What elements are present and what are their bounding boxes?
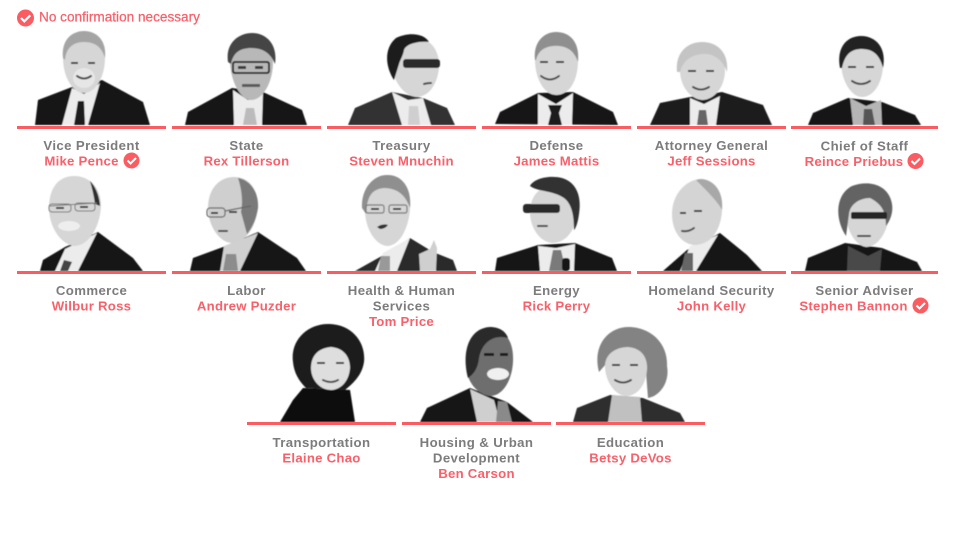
label: Homeland Security, John Kelly: Homeland Security: [648, 283, 775, 298]
label: Chief of Staff, Reince Priebus: [805, 138, 924, 169]
label: Housing & Urban Development, Ben Carson: Housing & Urban: [420, 435, 533, 450]
label: Education, Betsy DeVos: Education: [597, 435, 664, 450]
rule: Jeff Sessions: [637, 126, 786, 129]
label: Education, Betsy DeVos: [589, 435, 672, 466]
label: Labor, Andrew Puzder: Andrew Puzder: [197, 298, 296, 314]
label: Senior Adviser, Stephen Bannon: [799, 283, 928, 314]
label: Vice President, Mike Pence: Vice President: [43, 138, 140, 153]
label: Senior Adviser, Stephen Bannon: Stephen Bannon: [799, 298, 908, 314]
rule: Elaine Chao: [247, 422, 396, 425]
rule: Stephen Bannon: [791, 271, 938, 274]
rule: Andrew Puzder: [172, 271, 321, 274]
portrait: Rex Tillerson: [185, 33, 307, 125]
label: Attorney General, Jeff Sessions: [655, 138, 768, 168]
label: Senior Adviser, Stephen Bannon: Senior Adviser: [815, 283, 914, 298]
label: Health & Human Services, Tom Price: Tom Price: [369, 314, 434, 329]
label: Defense, James Mattis: James Mattis: [514, 154, 599, 168]
rule: John Kelly: [637, 271, 786, 274]
rule: Ben Carson: [402, 422, 551, 425]
rule: Betsy DeVos: [556, 422, 705, 425]
label: Energy, Rick Perry: Rick Perry: [523, 298, 591, 314]
label: Vice President, Mike Pence: Mike Pence: [44, 154, 119, 168]
label: State, Rex Tillerson: Rex Tillerson: [204, 154, 289, 168]
label: Transportation, Elaine Chao: [273, 435, 370, 466]
rule: James Mattis: [482, 126, 631, 129]
label: Vice President, Mike Pence: [43, 138, 140, 168]
portrait: John Kelly: [663, 179, 762, 271]
portrait: Jeff Sessions: [650, 42, 772, 125]
label: Attorney General, Jeff Sessions: Attorney General: [655, 138, 768, 153]
portrait: Tom Price: [355, 175, 457, 271]
label: Transportation, Elaine Chao: Elaine Chao: [282, 450, 361, 466]
portrait: Wilbur Ross: [40, 176, 143, 271]
label: Defense, James Mattis: Defense: [529, 138, 584, 153]
rule: Mike Pence: [17, 126, 166, 129]
rule: Steven Mnuchin: [327, 126, 476, 129]
label: Chief of Staff, Reince Priebus: Chief of Staff: [821, 138, 909, 154]
label: State, Rex Tillerson: [204, 138, 289, 168]
label: Labor, Andrew Puzder: [197, 283, 296, 314]
label: Energy, Rick Perry: Energy: [533, 283, 580, 298]
rule: Tom Price: [327, 271, 476, 274]
label: Treasury, Steven Mnuchin: [349, 138, 454, 168]
label: Housing & Urban Development, Ben Carson: Development: [433, 450, 520, 466]
rule: Rex Tillerson: [172, 126, 321, 129]
label: Commerce, Wilbur Ross: Commerce: [56, 283, 127, 298]
portrait: Elaine Chao: [280, 324, 364, 422]
label: Commerce, Wilbur Ross: Wilbur Ross: [52, 298, 131, 314]
rule: Rick Perry: [482, 271, 631, 274]
label: Homeland Security, John Kelly: [648, 283, 775, 314]
portrait: Rick Perry: [495, 177, 617, 271]
label: Chief of Staff, Reince Priebus: Reince Priebus: [805, 154, 903, 169]
label: Labor, Andrew Puzder: Labor: [227, 283, 266, 298]
portrait: Andrew Puzder: [190, 177, 306, 271]
label: Defense, James Mattis: [514, 138, 599, 168]
label: Homeland Security, John Kelly: John Kelly: [677, 298, 747, 314]
portrait: Ben Carson: [420, 327, 533, 422]
rule: Reince Priebus: [791, 126, 938, 129]
label: Commerce, Wilbur Ross: [52, 283, 131, 314]
label: Energy, Rick Perry: [523, 283, 591, 314]
label: Health & Human Services, Tom Price: [348, 283, 455, 329]
portrait: Steven Mnuchin: [348, 34, 455, 125]
label: Housing & Urban Development, Ben Carson: [420, 435, 533, 481]
portrait: Stephen Bannon: [805, 183, 922, 271]
portrait: James Mattis: [495, 32, 618, 125]
label: Transportation, Elaine Chao: Transportation: [273, 435, 370, 450]
legend: no confirmation necessary: No confirmation necessary: [39, 10, 200, 24]
label: Education, Betsy DeVos: Betsy DeVos: [589, 450, 672, 466]
label: State, Rex Tillerson: State: [229, 138, 264, 153]
label: Housing & Urban Development, Ben Carson: Ben Carson: [438, 466, 515, 481]
label: Health & Human Services, Tom Price: Health & Human: [348, 283, 455, 298]
label: Treasury, Steven Mnuchin: Steven Mnuchin: [349, 154, 454, 168]
label: Attorney General, Jeff Sessions: Jeff Sessions: [667, 154, 756, 168]
portrait: Betsy DeVos: [573, 327, 685, 422]
label: Health & Human Services, Tom Price: Services: [373, 298, 430, 314]
portrait: Mike Pence: [35, 31, 150, 125]
label: Treasury, Steven Mnuchin: Treasury: [372, 138, 431, 153]
portrait: Reince Priebus: [808, 36, 921, 125]
rule: Wilbur Ross: [17, 271, 166, 274]
